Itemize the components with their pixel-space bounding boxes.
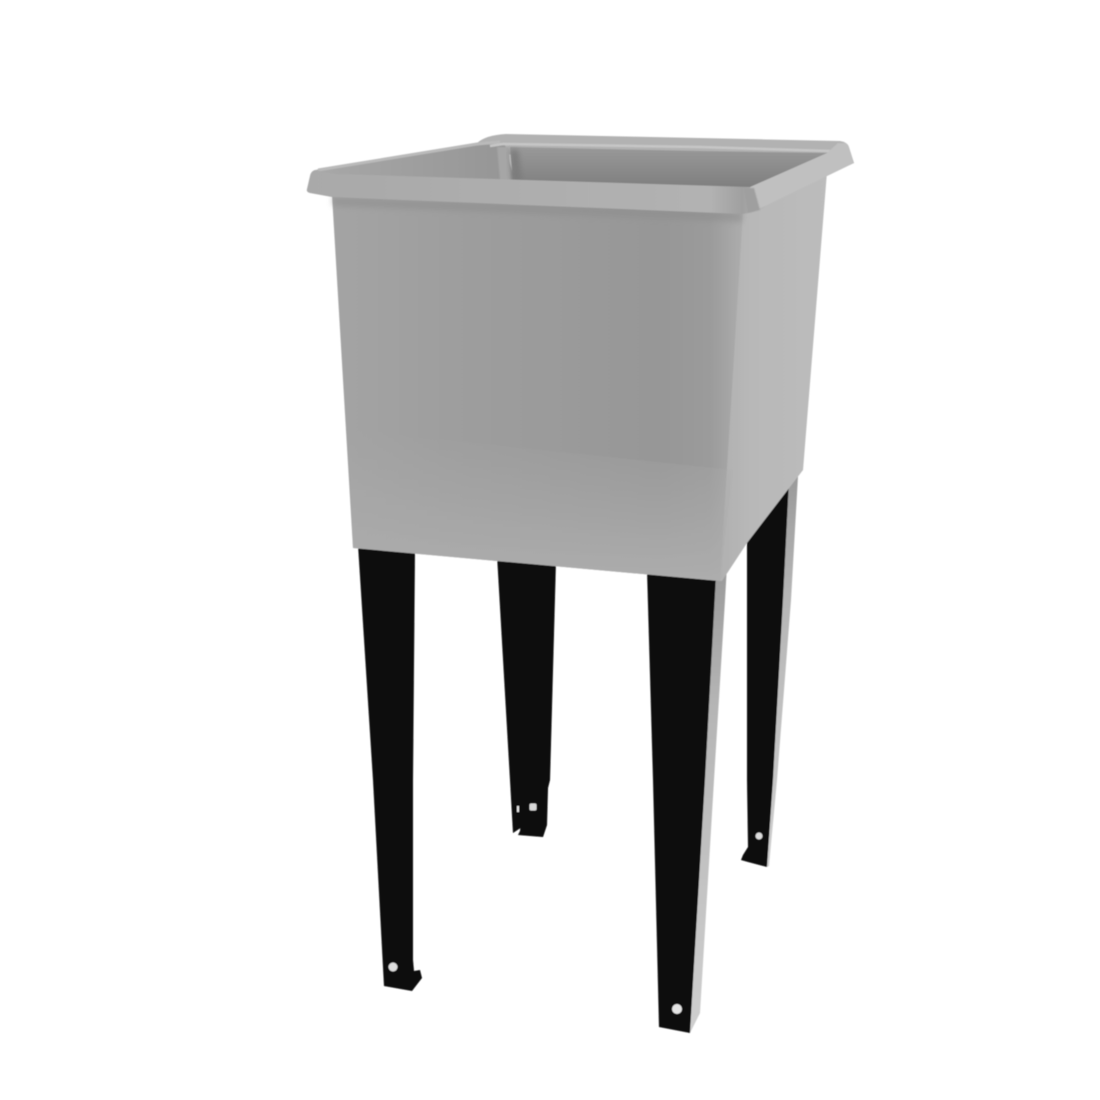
front right leg: [647, 565, 727, 1033]
sink tub body: [332, 172, 827, 581]
basin corner shading: [510, 150, 522, 182]
basin back wall: [510, 147, 828, 188]
basin corner fold highlight: [497, 147, 511, 180]
top edge highlight of left rim: [318, 142, 500, 170]
front lip: [307, 170, 765, 214]
back middle leg: [497, 555, 556, 837]
right lip lighter band: [750, 143, 854, 208]
back rim highlight: [490, 144, 830, 151]
sink rim and basin opening: [307, 134, 854, 214]
shadow beneath rim: [332, 197, 743, 222]
right side face: [718, 172, 827, 581]
left rim surface and wall: [315, 143, 515, 182]
back lip: [477, 134, 854, 195]
rim corner shading: [744, 188, 760, 213]
front left leg: [358, 545, 422, 991]
front face: [332, 195, 743, 581]
back right leg: [741, 476, 798, 867]
